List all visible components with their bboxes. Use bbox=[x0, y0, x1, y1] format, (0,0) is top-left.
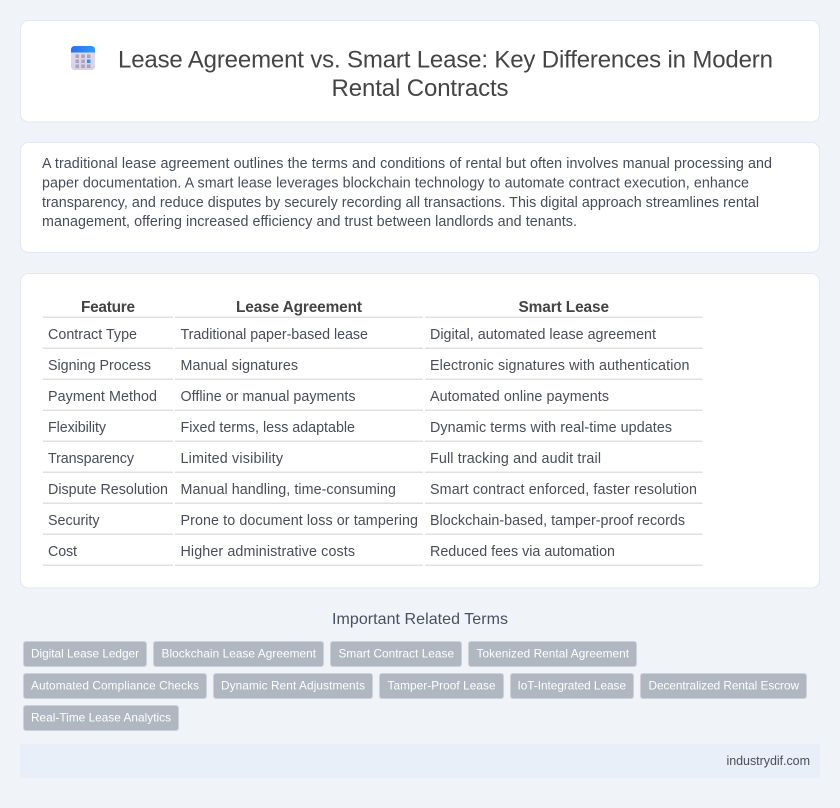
panel: header bbox=[20, 20, 820, 122]
text: description paragraph: A traditional lease agreement outlines the terms and conditions of rental but often involves manual processing and bbox=[42, 156, 772, 172]
chip: Real-Time Lease Analytics bbox=[31, 710, 171, 724]
row: security: Security bbox=[48, 513, 100, 529]
chip bbox=[24, 706, 178, 730]
title: Lease Agreement vs. Smart Lease: Key Differences in Modern bbox=[118, 46, 773, 74]
chip: Dynamic Rent Adjustments bbox=[221, 678, 365, 692]
row: transparency: Transparency bbox=[48, 451, 135, 467]
row: security bbox=[43, 513, 702, 535]
chip: Digital Lease Ledger bbox=[31, 646, 139, 660]
row: security: Prone to document loss or tampering bbox=[180, 513, 418, 529]
panel: comparison table bbox=[20, 274, 820, 588]
row: dispute resolution: Smart contract enforced, faster resolution bbox=[430, 482, 697, 498]
chip bbox=[24, 642, 146, 666]
row: dispute resolution: Manual handling, time-consuming bbox=[180, 482, 396, 498]
heading: important related terms: Important Related Terms bbox=[332, 611, 508, 628]
row: cost: Reduced fees via automation bbox=[430, 544, 615, 560]
row: transparency: Full tracking and audit trail bbox=[430, 451, 601, 467]
row: payment method bbox=[43, 389, 702, 411]
chip: Tokenized Rental Agreement bbox=[476, 646, 630, 660]
chip: IoT-Integrated Lease bbox=[518, 678, 626, 692]
footer: industrydif.com bbox=[726, 754, 810, 768]
icon: calendar bbox=[71, 46, 95, 70]
chip: Automated Compliance Checks bbox=[31, 678, 199, 692]
row: contract type bbox=[43, 327, 702, 349]
chip bbox=[154, 642, 324, 666]
row: transparency: Limited visibility bbox=[180, 451, 284, 467]
chip: Blockchain Lease Agreement bbox=[162, 646, 317, 660]
row: payment method: Offline or manual payments bbox=[180, 389, 356, 405]
row: payment method: Payment Method bbox=[48, 389, 157, 405]
row: cost bbox=[43, 544, 702, 566]
chip bbox=[380, 674, 504, 698]
row: cost: Higher administrative costs bbox=[180, 544, 355, 560]
title bbox=[118, 46, 773, 102]
text: description paragraph: management, offering increased efficiency and trust between landlords and tenants. bbox=[42, 214, 577, 230]
row: payment method: Automated online payments bbox=[430, 389, 609, 405]
row: signing process: Signing Process bbox=[48, 358, 151, 374]
row: contract type: Digital, automated lease agreement bbox=[430, 327, 656, 343]
row: signing process: Electronic signatures with authentication bbox=[430, 358, 690, 374]
text: description paragraph bbox=[42, 156, 772, 230]
chip bbox=[214, 674, 372, 698]
row: signing process: Manual signatures bbox=[180, 358, 298, 374]
chip bbox=[468, 642, 636, 666]
chip: Tamper-Proof Lease bbox=[388, 678, 496, 692]
table header row: Smart Lease bbox=[518, 299, 609, 316]
panel: related term chips bbox=[24, 642, 806, 730]
row: dispute resolution: Dispute Resolution bbox=[48, 482, 168, 498]
row: cost: Cost bbox=[48, 544, 77, 560]
chip bbox=[24, 674, 206, 698]
row: flexibility: Dynamic terms with real-time updates bbox=[430, 420, 672, 436]
table header row: Feature bbox=[81, 299, 135, 316]
row: security: Blockchain-based, tamper-proof records bbox=[430, 513, 685, 529]
chip: Decentralized Rental Escrow bbox=[648, 678, 799, 692]
row: contract type: Contract Type bbox=[48, 327, 137, 343]
row: contract type: Traditional paper-based lease bbox=[180, 327, 368, 343]
row: flexibility bbox=[43, 420, 702, 442]
chip bbox=[640, 674, 806, 698]
row: flexibility: Flexibility bbox=[48, 420, 107, 436]
chip bbox=[510, 674, 634, 698]
table header row: Lease Agreement bbox=[236, 299, 362, 316]
title: Rental Contracts bbox=[332, 75, 508, 102]
row: dispute resolution bbox=[43, 482, 702, 504]
chip bbox=[330, 642, 462, 666]
text: description paragraph: transparency, and reduce disputes by securely recording all transactions. This digital approach streamlines rental bbox=[42, 195, 759, 211]
row: transparency bbox=[43, 451, 702, 473]
row: flexibility: Fixed terms, less adaptable bbox=[180, 420, 355, 436]
footer bbox=[20, 744, 820, 778]
row: signing process bbox=[43, 358, 702, 380]
chip: Smart Contract Lease bbox=[338, 646, 454, 660]
text: description paragraph: paper documentation. A smart lease leverages blockchain technology to automate contract execution, enhance bbox=[42, 176, 749, 192]
table header row bbox=[43, 299, 702, 318]
panel: description bbox=[20, 142, 820, 252]
